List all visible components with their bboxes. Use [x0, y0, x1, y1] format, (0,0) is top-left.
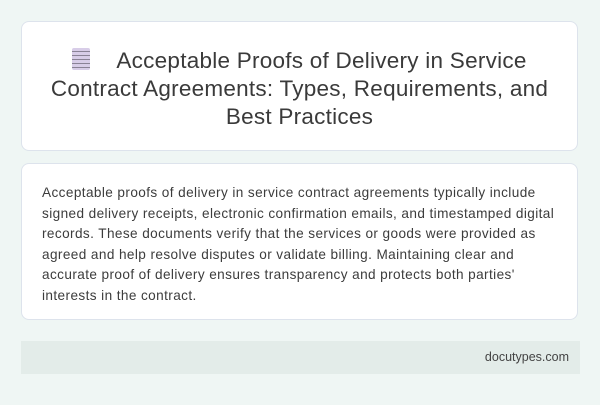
panel: title card: [21, 21, 578, 151]
panel: description: [21, 163, 578, 320]
description text: Acceptable proofs of delivery in service contract agreements typically include signed delivery receipts, electronic confirmation emails, and timestamped digital records. These documents verify that the services or goods were provided as agreed and help resolve disputes or validate billing. Maintaining clear and accurate proof of delivery ensures transparency and protects both parties' interests in the contract.: [42, 185, 554, 302]
title: Acceptable Proofs of Delivery in Service Contract Agreements: Types, Requirements, and Best Practices: [51, 48, 548, 129]
footer text: docutypes.com: [485, 350, 569, 364]
icon: document receipt: [72, 48, 90, 70]
footer: [21, 341, 580, 374]
